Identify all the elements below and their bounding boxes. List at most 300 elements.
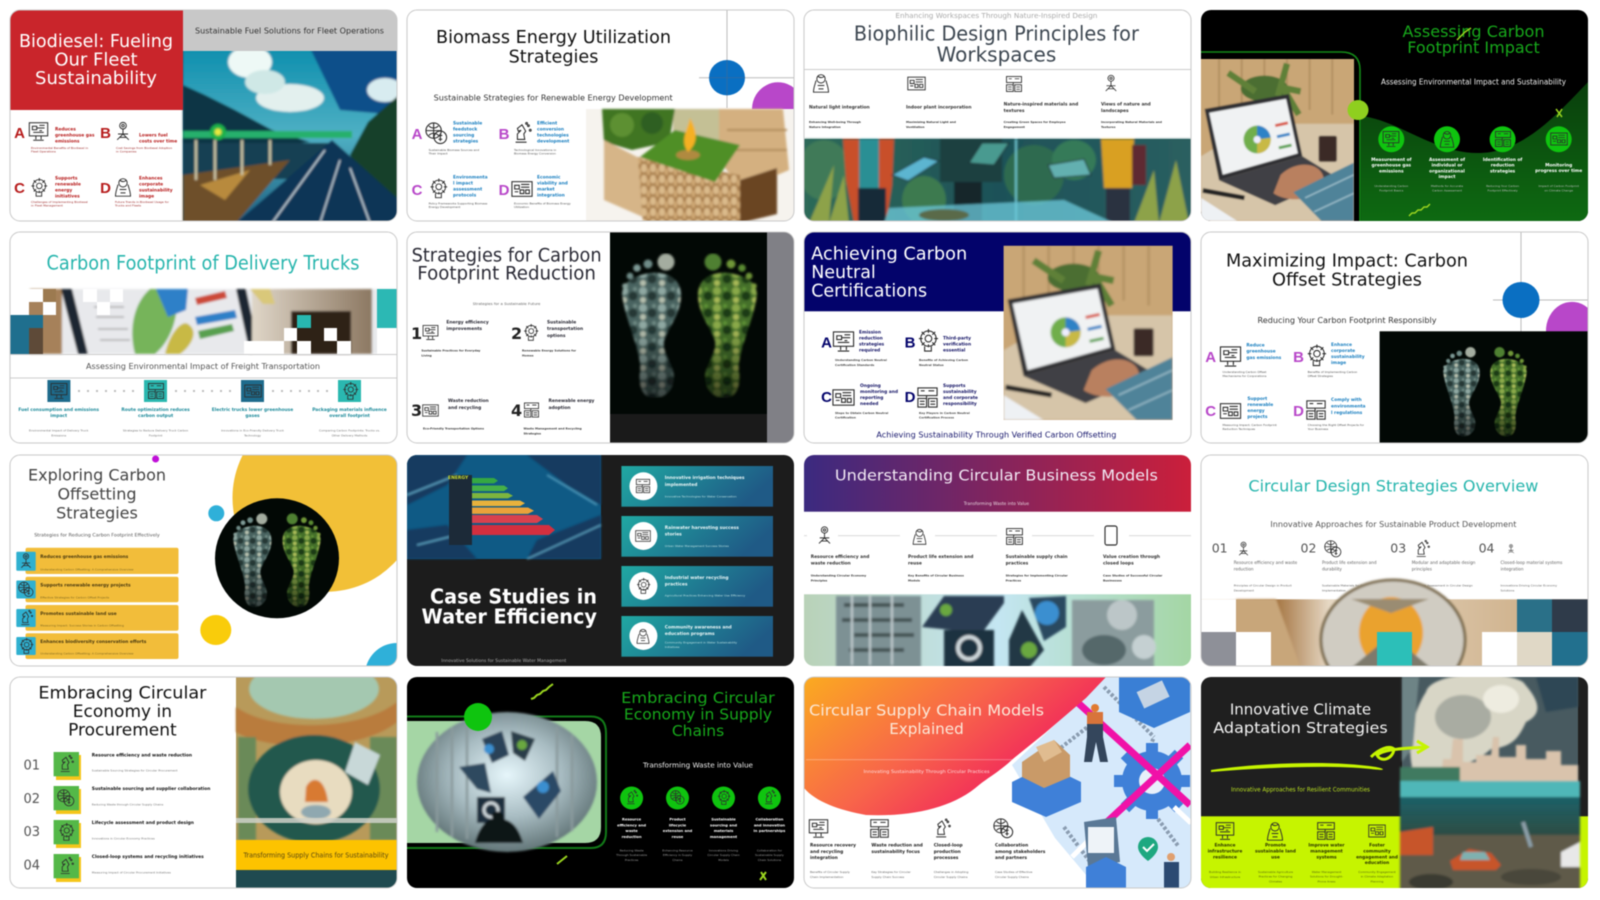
step 2: Practices for Changing [1259, 875, 1293, 879]
title band: Biodiesel: Our Fleet [54, 50, 138, 70]
item D: D [905, 389, 916, 406]
step 2: impact [1439, 174, 1455, 180]
step 4: Circular Supply Chains [995, 875, 1029, 879]
column 2: Key Benefits of Circular Business [908, 574, 964, 578]
step 2: Supply Chain Success [871, 875, 905, 879]
step 4: and partners [995, 855, 1027, 861]
panel: Biomass slide [407, 10, 794, 223]
item A: strategies [859, 342, 885, 348]
frame line [1201, 52, 1360, 221]
column 2: Ventilation [906, 125, 925, 129]
item D: Economic [537, 176, 560, 180]
title line 3: Chains [672, 722, 724, 740]
panel: Carbon offset strategies slide [1201, 232, 1589, 443]
column 3: practices [1006, 561, 1029, 567]
column 2: Models [908, 579, 920, 583]
item D: Economic Benefits of Biomass Energy [514, 202, 571, 206]
item D: Comply with [1331, 398, 1362, 403]
subtitle: Assessing Environmental Impact of Freight Transportation [86, 362, 320, 371]
item 3: Eco-Friendly Transportation Options [423, 427, 484, 431]
item B: development [537, 138, 569, 144]
case card 4: education programs [665, 631, 715, 637]
step 3: Improve water [1308, 844, 1345, 848]
step 2: individual or [1431, 163, 1463, 169]
step 2: Route optimization reduces [121, 408, 190, 413]
brush stroke and arrow [1211, 741, 1427, 772]
step 1 [1371, 126, 1412, 192]
illustration: circular economy machinery [804, 594, 1191, 668]
title line 2: Economy in Supply [624, 706, 772, 724]
step 4: in Climate Adaptation [1361, 875, 1393, 879]
step 2: Sustainable Agriculture [1258, 870, 1293, 874]
item B: Biomass Energy Conversion [514, 152, 556, 156]
item A: Mechanisms for Corporations [1222, 374, 1267, 378]
item A [14, 123, 95, 154]
step 1: infrastructure [1208, 848, 1242, 854]
item B: image [1331, 360, 1346, 366]
title line 2: Footprint Reduction [417, 264, 596, 285]
step 1: resilience [1213, 854, 1237, 860]
eyebrow: Enhancing Workspaces Through Nature-Inspired Design [895, 12, 1097, 20]
item A [1205, 342, 1282, 378]
step 3: Circular Supply Chains [934, 875, 968, 879]
row 01: Sustainable Sourcing Strategies for Circular Procurement [92, 769, 178, 773]
case card 4: Initiatives [665, 645, 680, 649]
panel: Climate adaptation strategies slide [1201, 674, 1588, 890]
item D: market [537, 186, 555, 192]
step 2: sustainable land [1255, 848, 1296, 854]
step 1: Footprint Basics [1379, 188, 1404, 192]
photo: circular design sculpture with mosaic [1201, 580, 1588, 700]
step 3 [1308, 823, 1345, 883]
title band: Biodiesel: Sustainability [35, 68, 157, 89]
panel: Circular economy in procurement slide [10, 659, 397, 888]
item 3: 3 [411, 401, 422, 420]
item A: A [821, 334, 832, 352]
navy title band: Achieving Carbon [811, 245, 967, 265]
case card 4: Community awareness and [665, 626, 732, 630]
title: Case Studies in [430, 584, 597, 608]
subtitle: Strategies for a Sustainable Future [473, 301, 541, 306]
lime ellipse [1348, 100, 1368, 120]
step 02: 02 [1300, 540, 1316, 556]
step 04: Closed-loop material systems [1500, 560, 1562, 565]
item D: environmenta [1331, 404, 1366, 410]
title: Exploring Carbon [28, 466, 166, 485]
case card 4: Community Engagement in Water Sustainability [665, 640, 737, 644]
row 03: Lifecycle assessment and product design [92, 820, 194, 826]
item C: assessment [453, 186, 482, 192]
subtitle band [183, 10, 397, 51]
subtitle band: Sustainable Fuel Solutions for Fleet Operations [195, 26, 384, 36]
step 02 [1300, 540, 1383, 592]
gradient blob [804, 677, 1106, 815]
item C: projects [1247, 414, 1268, 420]
case card 3 [621, 566, 773, 607]
step 3 [1483, 126, 1522, 192]
item D: Supports [943, 384, 965, 389]
item B: Lowers fuel [139, 134, 168, 138]
case card 3: Industrial water recycling [665, 576, 728, 581]
step 4: Community Engagement [1358, 870, 1396, 874]
step 4: Other Delivery Methods [332, 433, 368, 437]
item D: Your Business [1308, 427, 1329, 431]
column 4 [1101, 75, 1162, 129]
item D: responsibility [943, 401, 977, 407]
item C: Energy Development [429, 205, 461, 209]
step 3: Challenges in Adopting [934, 870, 968, 874]
item 2: options [547, 333, 566, 339]
item C: Certification [835, 415, 856, 419]
bar 4 [16, 633, 178, 659]
step 2 [1429, 126, 1465, 192]
item D: viability and [537, 180, 568, 186]
photo: footprints on black [1380, 331, 1589, 443]
title line 3: Strategies [56, 503, 138, 522]
step 2 [662, 786, 693, 862]
step 01 [1212, 540, 1298, 592]
step 2: Climates [1269, 879, 1282, 883]
title: Maximizing Impact: Carbon [1226, 250, 1468, 271]
step 1: emissions [1379, 168, 1404, 174]
item 2 [511, 320, 583, 357]
step 4: Collaboration [755, 818, 783, 822]
item C: monitoring and [860, 389, 898, 395]
item D: D [1293, 403, 1304, 420]
column 4: closed loops [1103, 561, 1134, 567]
item A: A [14, 125, 25, 142]
step 4: Chain Solutions [758, 858, 781, 862]
step 3: Water Management [1312, 870, 1341, 874]
item D: Utilization [514, 205, 529, 209]
column 4: landscapes [1101, 108, 1129, 114]
step 1: and recycling [810, 849, 843, 855]
item 4: Strategies [524, 431, 541, 435]
subtitle: Strategies for Reducing Carbon Footprint Effectively [34, 532, 160, 538]
step 2 [1255, 823, 1296, 883]
navy title band: Certifications [811, 282, 927, 302]
title line 2: Economy in [73, 702, 172, 722]
step 4: on Climate Change [1544, 188, 1573, 192]
item C: C [412, 182, 423, 199]
item B: Efficient [537, 122, 557, 126]
item B: Enhance [1331, 343, 1352, 348]
diagram: supply chain isometric network [1012, 677, 1191, 888]
step 1: Understanding Carbon [1374, 184, 1408, 188]
item 1: Living [421, 353, 432, 357]
step 3: Technology [243, 433, 261, 437]
item C: C [821, 389, 832, 406]
illustration: circular ring scene [236, 659, 397, 888]
item B: B [905, 334, 916, 352]
step 4 [1535, 126, 1582, 192]
connector lines [804, 535, 1191, 537]
step 3: Sustainable [711, 818, 736, 822]
step 04: 04 [1479, 540, 1495, 556]
item A: Understanding Carbon Neutral [835, 358, 887, 362]
step 3: gases [245, 414, 260, 419]
column 1: Nature Integration [809, 125, 841, 129]
item B: technologies [537, 132, 569, 138]
row 04: 04 [24, 858, 40, 874]
step 4: Foster [1369, 844, 1385, 848]
step 2: Strategies to Reduce Delivery Truck Carbon [123, 429, 188, 433]
step 4: Collaboration [995, 844, 1028, 848]
bar 2: Supports renewable energy projects [40, 582, 131, 588]
item A: Reduce [1246, 344, 1265, 348]
decorative circles and cross lines [699, 10, 794, 109]
item B: essential [943, 348, 966, 354]
title line 2: Strategies [509, 48, 598, 68]
step 04: integration [1500, 566, 1524, 572]
row 01: 01 [24, 758, 40, 774]
step 3: Electric trucks lower greenhouse [212, 408, 293, 413]
item B: conversion [537, 126, 564, 132]
column 3: textures [1004, 108, 1025, 114]
step 2 [871, 820, 923, 879]
panel: Circular economy in supply chains slide [407, 677, 794, 888]
item 2: Sustainable [547, 320, 576, 326]
gradient title band [804, 455, 1191, 512]
step 3: reduction [1491, 163, 1514, 169]
item 4 [511, 398, 595, 435]
step 1: Building Resilience in [1209, 870, 1241, 874]
photo: fuel station on highway [183, 46, 403, 223]
case card 1 [621, 466, 773, 507]
row 03: 03 [24, 825, 40, 840]
item C [1205, 396, 1278, 431]
step 2: Methods for Accurate [1431, 184, 1463, 188]
case card 3: practices [665, 582, 688, 588]
item 1: improvements [446, 326, 482, 332]
step 1 [1208, 823, 1242, 879]
item C: Environmenta [453, 176, 488, 180]
row 04 [24, 854, 204, 882]
item D: Enhances [139, 176, 163, 182]
step 1: impact [50, 413, 67, 419]
column 1 [809, 75, 870, 129]
title: Embracing Circular [621, 689, 775, 707]
item C: needed [860, 401, 878, 407]
step 2: Chains [672, 858, 683, 862]
step 4: Collaboration for [757, 848, 782, 852]
panel: Carbon neutral certifications slide [804, 232, 1191, 443]
item C: Challenges of Implementing Biodiesel [31, 200, 88, 204]
title: Circular Design Strategies Overview [1248, 477, 1538, 496]
step 2: Promote [1265, 844, 1286, 848]
photo: biomass pellets and wood block [586, 109, 794, 223]
title: Embracing Circular [38, 684, 206, 704]
item C: Support [1247, 397, 1267, 402]
item B: B [499, 126, 510, 143]
step 4: Sustainable Supply [755, 853, 784, 857]
item 4: Waste Management and Recycling [524, 427, 582, 431]
step 2: Product [669, 818, 686, 822]
title line 2: Offset Strategies [1272, 269, 1422, 290]
item D: integration [537, 192, 565, 198]
column 3: Engagement [1004, 125, 1025, 129]
item C: initiatives [55, 194, 80, 200]
step 4: Planning [1371, 879, 1384, 883]
step 2: Footprint [149, 433, 163, 437]
column 4: Views of nature and [1101, 102, 1151, 108]
photo: laptop carbon report [999, 241, 1179, 425]
item B: Benefits of Implementing Carbon [1308, 370, 1357, 374]
title line 2: Explained [889, 720, 964, 738]
step 4: Packaging materials influence [312, 408, 387, 413]
step 03 [1390, 540, 1476, 592]
item 1: Sustainable Practices for Everyday [421, 349, 480, 353]
step 3: Footprint Effectively [1488, 188, 1518, 192]
step 2: Key Strategies for Circular [871, 870, 911, 874]
column 1: Resource efficiency and [811, 555, 869, 560]
item D: Future Trends in Biodiesel Usage for [115, 200, 169, 204]
item C: Steps to Obtain Carbon Neutral [835, 411, 888, 415]
title band: Biodiesel: Biodiesel: Fueling [19, 31, 173, 52]
step 1: Benefits of Circular Supply [810, 870, 850, 874]
case card 2: Urban Water Management Success Stories [665, 544, 729, 548]
step 2: Efficiency in Supply [663, 853, 692, 857]
step 04 [1479, 540, 1562, 592]
subtitle: Assessing Environmental Impact and Sustainability [1381, 78, 1567, 86]
column 2 [906, 77, 971, 129]
step 1: Resource [622, 818, 641, 822]
item A: gas emissions [1246, 355, 1282, 361]
title: Strategies for Carbon [412, 245, 602, 266]
case card 2 [621, 516, 773, 557]
item C: renewable [1247, 402, 1273, 408]
step 03: principles [1412, 566, 1432, 572]
column 1: waste reduction [811, 561, 851, 567]
step 4 [312, 380, 387, 437]
case card 4 [621, 616, 773, 657]
item D [100, 176, 173, 208]
column 1: Principles [811, 579, 828, 583]
item A: Sustainable Biomass Sources and [429, 148, 479, 152]
row 02: Sustainable sourcing and supplier collaboration [92, 786, 210, 792]
subtitle: Innovating Sustainability Through Circular Practices [864, 769, 990, 774]
item A [412, 120, 482, 156]
item 2: Homes [522, 353, 534, 357]
step 4: in partnerships [754, 829, 786, 833]
bar 1: Understanding Carbon Offsetting: A Comprehensive Overview [40, 567, 134, 571]
step 3: Closed-loop [934, 844, 963, 848]
item C: renewable [55, 182, 81, 188]
step 4 [754, 786, 786, 862]
case card 3: Agricultural Practices Enhancing Water Use Efficiency [665, 594, 745, 598]
item 2: transportation [547, 326, 583, 332]
column 4: Businesses [1103, 579, 1122, 583]
item A: Sustainable [453, 122, 482, 126]
title line 2: Adaptation Strategies [1213, 719, 1388, 737]
step 3 [707, 786, 740, 862]
column 4 [1103, 526, 1163, 583]
footer subtitle: Achieving Sustainability Through Verified Carbon Offsetting [876, 430, 1116, 440]
column 3: Strategies for Implementing Circular [1006, 574, 1068, 578]
illustration: recycling symbol [407, 712, 601, 852]
item A: Environmental Benefits of Biodiesel in [31, 146, 88, 150]
step 03: 03 [1390, 540, 1406, 556]
title: Carbon Footprint of Delivery Trucks [46, 252, 360, 275]
item C: in Fleet Management [31, 204, 64, 208]
item B [100, 122, 177, 154]
step 3: systems [1316, 854, 1337, 860]
step 4: among stakeholders [995, 849, 1046, 855]
step 01: Principles of Circular Design in Product [1234, 583, 1292, 587]
item 3 [411, 398, 489, 431]
step 3: strategies [1490, 168, 1516, 174]
panel: Exploring carbon offsetting slide [10, 404, 429, 707]
step 3: materials [714, 829, 734, 833]
column 4: Value creation through [1103, 555, 1160, 560]
item C: Reduction Techniques [1222, 427, 1256, 431]
green wave [1361, 82, 1588, 221]
step 2: lifecycle [669, 823, 687, 827]
step 01: Development [1234, 588, 1255, 592]
step 1: reduction [622, 835, 642, 839]
title: Innovative Climate [1230, 701, 1371, 719]
bar 4: Enhances biodiversity conservation efforts [40, 639, 147, 645]
item B [1293, 342, 1365, 378]
item A: A [1205, 349, 1216, 366]
item B: B [1293, 349, 1304, 366]
step 01: 01 [1212, 540, 1228, 556]
item C: C [1205, 403, 1216, 420]
item A: Their Impact [428, 152, 448, 156]
photo: energy rating chart [407, 455, 601, 559]
column 2: Maximizing Natural Light and [906, 120, 956, 124]
item B: costs over time [139, 138, 177, 144]
step 2: Enhancing Resource [662, 848, 693, 852]
item B: B [100, 125, 111, 142]
photo band with pixel mosaic [10, 289, 397, 354]
bar 2 [16, 577, 178, 602]
title line 2: Workspaces [937, 42, 1056, 66]
item 1: Energy efficiency [446, 320, 489, 326]
row 03: Innovations in Circular Economy Practices [92, 837, 155, 841]
item A: required [859, 348, 880, 354]
title line 2: Offsetting [57, 484, 137, 503]
column 4: Incorporating Natural Materials and [1101, 120, 1162, 124]
item A: A [412, 126, 423, 143]
item B: Technological Innovations in [514, 148, 556, 152]
item 2: Renewable Energy Solutions for [522, 349, 576, 353]
item D: sustainability [943, 389, 977, 395]
step 2: use [1271, 855, 1280, 860]
item A: greenhouse [1246, 348, 1276, 354]
item C: energy [1247, 408, 1265, 414]
panel: Circular supply chain models slide [804, 677, 1191, 888]
item D: sustainability [139, 188, 173, 194]
bar 3 [16, 605, 178, 631]
item A: Reduces [55, 128, 76, 132]
rule [806, 759, 1014, 761]
item 4: 4 [511, 401, 522, 420]
item 4: Renewable energy [548, 399, 594, 404]
subtitle: Transforming Waste into Value [642, 762, 753, 770]
row 04: Closed-loop systems and recycling initiatives [92, 854, 204, 860]
row 01 [24, 752, 192, 780]
item B: Offset Strategies [1308, 374, 1333, 378]
rule [804, 69, 1191, 70]
item B [905, 329, 971, 367]
step 2: carbon output [138, 413, 173, 419]
frame [407, 716, 606, 848]
step 04: Solutions [1500, 588, 1515, 592]
step 4: engagement and [1356, 854, 1398, 860]
item D: Certification Process [919, 415, 954, 419]
panel: Circular design strategies slide [1201, 455, 1588, 700]
